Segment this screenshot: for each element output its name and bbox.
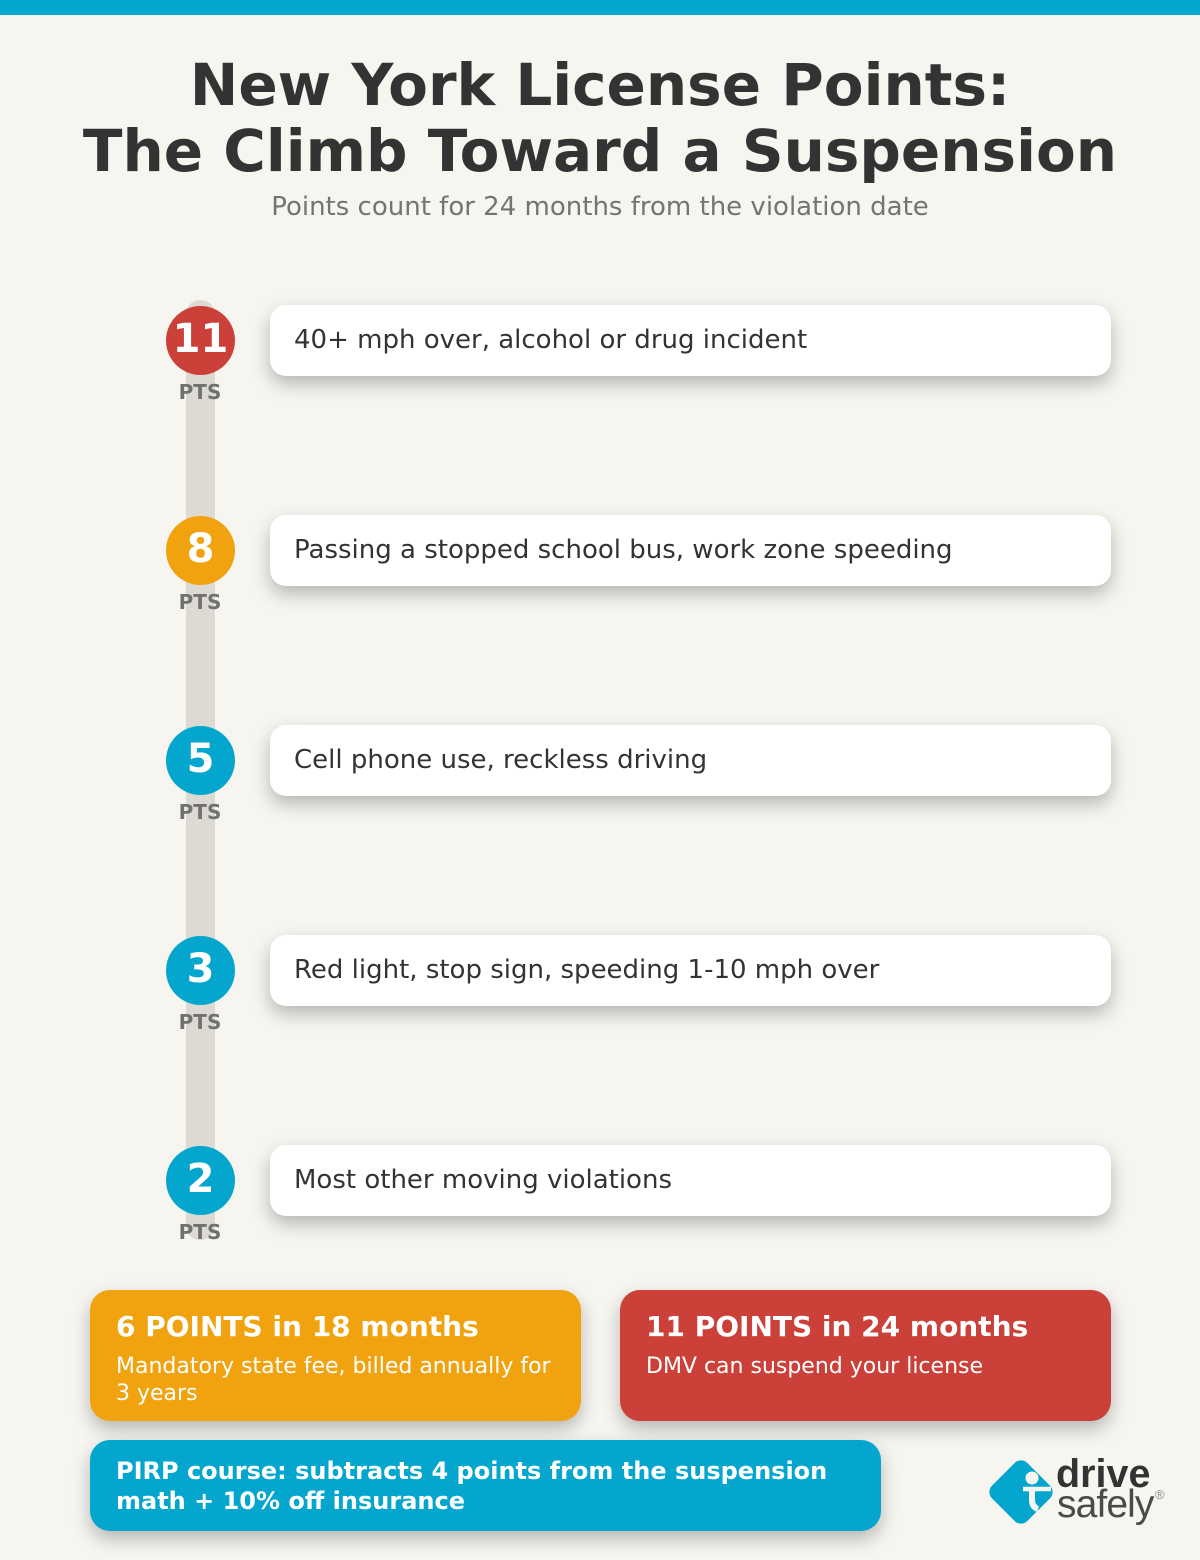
logo registered mark: ® <box>1155 1487 1165 1502</box>
card: 11 points violations <box>270 305 1111 376</box>
callout body: Mandatory state fee, billed annually for <box>116 1354 551 1379</box>
step: 8 points <box>166 513 1121 614</box>
label: PTS: PTS <box>179 380 221 404</box>
logo word: safely: safely <box>1057 1483 1153 1526</box>
icon: logo diamond <box>989 1460 1053 1524</box>
badge: 2 <box>166 1146 235 1215</box>
card: 3 points violations: Red light, stop sign, speeding 1-10 mph over <box>294 955 879 985</box>
badge: 3 <box>166 936 235 1005</box>
card: 2 points violations: Most other moving violations <box>294 1165 672 1195</box>
top accent bar <box>0 0 1200 15</box>
title: The Climb Toward a Suspension <box>83 117 1117 185</box>
badge: 3: 3 <box>187 946 214 992</box>
callout body: 3 years <box>116 1381 198 1406</box>
callout: PIRP course <box>90 1440 881 1531</box>
callout heading: 6 POINTS in 18 months <box>116 1310 479 1343</box>
card: 8 points violations: Passing a stopped school bus, work zone speeding <box>294 535 953 565</box>
badge: 11: 11 <box>173 316 228 362</box>
label: PTS: PTS <box>179 1220 221 1244</box>
step: 11 points <box>166 303 1121 404</box>
callout text: PIRP course: subtracts 4 points from the suspension <box>116 1457 827 1485</box>
callout body: DMV can suspend your license <box>646 1354 983 1379</box>
badge: 2: 2 <box>187 1156 214 1202</box>
badge: 11 <box>166 306 235 375</box>
callout: 6 points in 18 months <box>90 1290 581 1421</box>
logo word: drive: drive <box>1056 1452 1150 1496</box>
subtitle: Points count for 24 months from the violation date <box>271 192 929 222</box>
logo: drive safely <box>989 1452 1165 1526</box>
timeline track <box>186 300 215 1240</box>
card: 8 points violations <box>270 515 1111 586</box>
callout: 11 points in 24 months <box>620 1290 1111 1421</box>
card: 2 points violations <box>270 1145 1111 1216</box>
step: 3 points <box>166 933 1121 1034</box>
callout text <box>116 1457 827 1515</box>
card: 5 points violations <box>270 725 1111 796</box>
step: 5 points <box>166 723 1121 824</box>
label: PTS: PTS <box>179 590 221 614</box>
callout body <box>116 1354 551 1406</box>
card: 11 points violations: 40+ mph over, alcohol or drug incident <box>294 325 807 355</box>
badge: 5 <box>166 726 235 795</box>
badge: 8 <box>166 516 235 585</box>
step: 2 points <box>166 1143 1121 1244</box>
label: PTS: PTS <box>179 800 221 824</box>
label: PTS: PTS <box>179 1010 221 1034</box>
callout text: math + 10% off insurance <box>116 1487 465 1515</box>
badge: 5: 5 <box>187 736 214 782</box>
badge: 8: 8 <box>187 526 214 572</box>
title: New York License Points: <box>190 51 1010 119</box>
title <box>83 51 1117 185</box>
card: 3 points violations <box>270 935 1111 1006</box>
card: 5 points violations: Cell phone use, reckless driving <box>294 745 707 775</box>
callout heading: 11 POINTS in 24 months <box>646 1310 1028 1343</box>
